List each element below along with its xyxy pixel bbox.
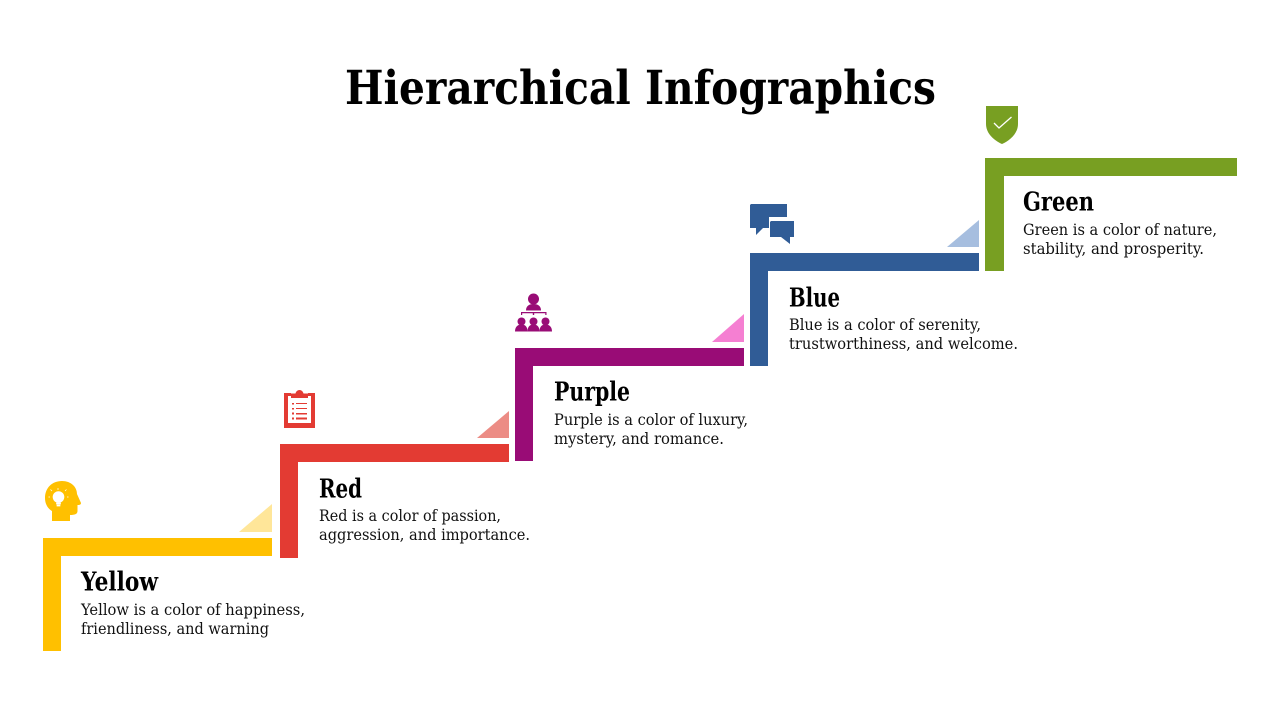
icon: clipboard bbox=[284, 390, 315, 428]
red description: Red is a color of passion, bbox=[319, 506, 501, 525]
yellow description: Yellow is a color of happiness, bbox=[80, 600, 305, 619]
red heading: Red bbox=[319, 474, 362, 504]
red description: aggression, and importance. bbox=[319, 525, 530, 544]
yellow triangle bbox=[239, 504, 272, 532]
green description bbox=[1023, 220, 1217, 258]
panel: blue step bbox=[750, 204, 1018, 366]
icon: head with light bulb bbox=[45, 481, 81, 521]
purple bracket bbox=[515, 348, 744, 461]
icon: shield with check bbox=[986, 106, 1018, 144]
yellow bracket bbox=[43, 538, 272, 651]
yellow heading: Yellow bbox=[80, 568, 159, 598]
green description: stability, and prosperity. bbox=[1023, 239, 1204, 258]
panel: purple step bbox=[515, 294, 748, 461]
title: Hierarchical Infographics bbox=[345, 61, 936, 116]
icon: speech bubbles bbox=[750, 204, 794, 244]
yellow description bbox=[80, 600, 305, 638]
blue description: Blue is a color of serenity, bbox=[789, 315, 981, 334]
panel: red step bbox=[280, 390, 530, 558]
purple description bbox=[554, 410, 748, 448]
green description: Green is a color of nature, bbox=[1023, 220, 1217, 239]
purple description: Purple is a color of luxury, bbox=[554, 410, 748, 429]
yellow description: friendliness, and warning bbox=[81, 619, 269, 638]
blue bracket bbox=[750, 253, 979, 366]
purple triangle bbox=[712, 314, 744, 342]
red triangle bbox=[477, 411, 509, 438]
blue description bbox=[789, 315, 1018, 353]
green heading: Green bbox=[1023, 188, 1094, 218]
icon: team hierarchy bbox=[515, 294, 552, 332]
red description bbox=[319, 506, 530, 544]
red bracket bbox=[280, 444, 509, 558]
blue description: trustworthiness, and welcome. bbox=[789, 334, 1018, 353]
green bracket bbox=[985, 158, 1237, 271]
panel: green step bbox=[985, 106, 1237, 271]
purple description: mystery, and romance. bbox=[554, 429, 724, 448]
blue triangle bbox=[947, 220, 979, 247]
panel: yellow step bbox=[43, 481, 305, 651]
blue heading: Blue bbox=[789, 284, 840, 314]
purple heading: Purple bbox=[554, 378, 630, 408]
